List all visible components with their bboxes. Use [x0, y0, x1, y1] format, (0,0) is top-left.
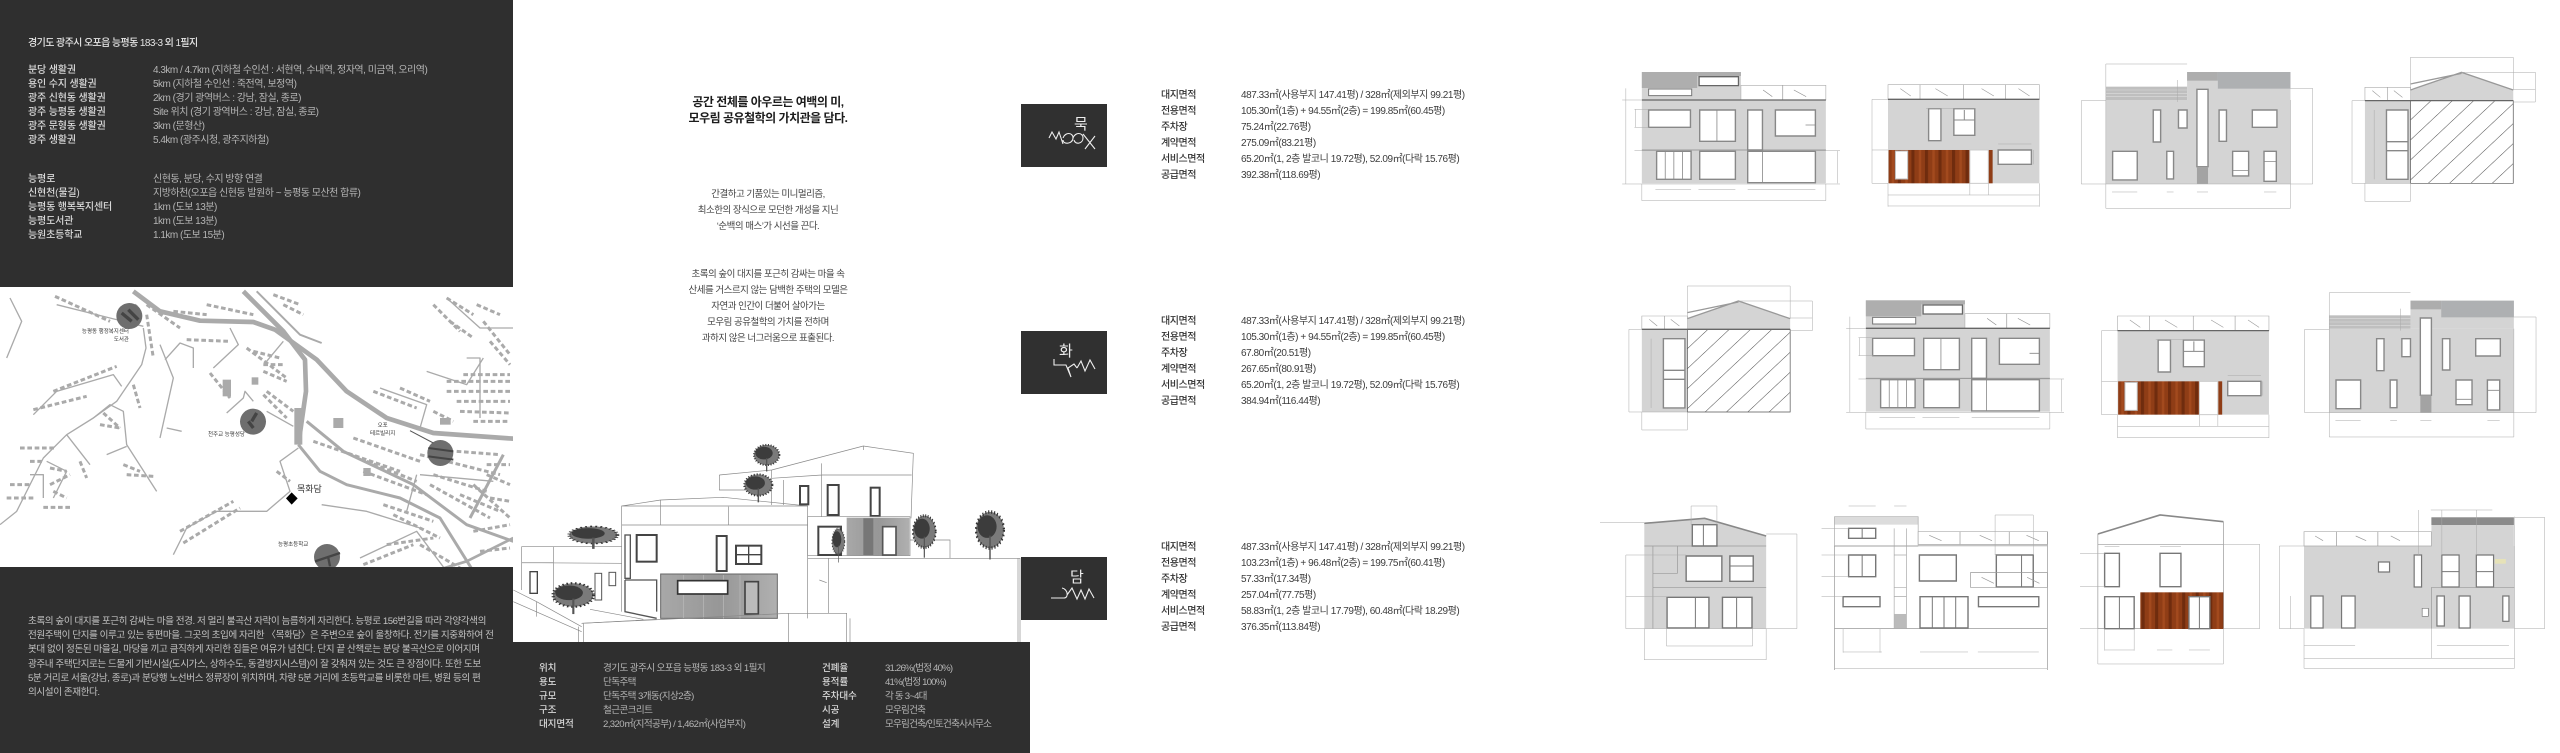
- badge squiggle: [1053, 358, 1096, 378]
- overview table: left: 철근콘크리트: [603, 705, 652, 716]
- elevation row: 묵: [1622, 57, 2535, 208]
- headline: concept title: 공간 전체를 아우르는 여백의 미,: [692, 95, 844, 109]
- trees: [553, 445, 1004, 614]
- specs: 화: 267.65㎡(80.91평): [1241, 364, 1316, 375]
- map labels: [82, 328, 395, 548]
- badge character: 담: [1070, 569, 1084, 586]
- specs: 묵: 공급면적: [1161, 170, 1196, 181]
- elevation: front: [1846, 300, 2064, 429]
- description paragraph: 5분 거리로 서울(강남, 종로)과 분당행 노선버스 정류장이 위치하며, 차량 5분 거리에 초등학교를 비롯한 마트, 병원 등의 편: [28, 673, 480, 684]
- specs: 화: 67.80㎡(20.51평): [1241, 348, 1311, 359]
- list: living areas: 4.3km / 4.7km (지하철 수인선 : 서현역, 수내역, 정자역, 미금역, 오리역): [153, 65, 427, 76]
- specs: 담: 57.33㎡(17.34평): [1241, 574, 1311, 585]
- overview table: left: 규모: [539, 691, 556, 702]
- list: living areas: 광주 문형동 생활권: [28, 121, 106, 132]
- road: local streets: [0, 298, 513, 571]
- badge: 화: [1021, 331, 1107, 394]
- label: 빌리지: [370, 422, 395, 437]
- specs: 화: 주차장: [1161, 348, 1187, 359]
- badge: 묵: [1021, 104, 1107, 167]
- elevation: party wall: [1629, 286, 1812, 430]
- list: living areas: 광주 능평동 생활권: [28, 107, 106, 118]
- list: living areas: Site 위치 (경기 광역버스 : 강남, 잠실, 종로): [153, 107, 318, 118]
- overview table: right: 41%(법정 100%): [885, 677, 946, 688]
- badge squiggle: [1051, 587, 1094, 600]
- label: 행정복지센터: [82, 328, 129, 343]
- upper house: [719, 446, 913, 518]
- text: philosophy: 과하지 않은 너그러움으로 표출된다.: [702, 333, 834, 344]
- label: 초등학교: 능평초등학교: [278, 542, 308, 548]
- specs: 화: 전용면적: [1161, 332, 1196, 343]
- list: nearby facilities: 능원초등학교: [28, 230, 82, 241]
- panel: location info: [0, 0, 513, 287]
- elevation: grey flank: [2279, 510, 2545, 668]
- lower right block: [808, 517, 950, 558]
- overview table: left: 2,320㎡(지적공부) / 1,462㎡(사업부지): [603, 719, 745, 730]
- list: nearby facilities: 지방하천(오포읍 신현동 발원하 ~ 능평동 모산천 합류): [153, 188, 360, 199]
- specs: 담: 257.04㎡(77.75평): [1241, 590, 1316, 601]
- list: nearby facilities: 신현천(물길): [28, 188, 80, 199]
- specs: 묵: 계약면적: [1161, 138, 1196, 149]
- list: nearby facilities: 1km (도보 13분): [153, 202, 217, 213]
- specs: 화: 65.20㎡(1, 2층 발코니 19.72평), 52.09㎡(다락 15.76평): [1241, 380, 1459, 391]
- illustration: perspective line drawing of the houses: [513, 444, 1020, 642]
- specs: 담: 계약면적: [1161, 590, 1196, 601]
- overview table: right: 건폐율: [822, 663, 848, 674]
- text: philosophy: 모우림 공유철학의 가치를 전하며: [707, 317, 829, 328]
- label: 빌리지: 테르빌리지: [370, 431, 395, 437]
- elevation: rear: [2102, 316, 2269, 438]
- marker: 성당: [240, 409, 266, 435]
- panel: project overview: [513, 642, 1030, 753]
- overview table: right: 설계: [822, 719, 839, 730]
- text: philosophy: 산세를 거스르지 않는 담백한 주택의 모델은: [688, 285, 848, 296]
- overview table: right: 각 동 3~4대: [885, 691, 927, 702]
- label: 행정복지센터: 능평동 행정복지센터: [82, 329, 129, 335]
- specs: 담: 대지면적: [1161, 542, 1196, 553]
- specs: 담: [1161, 540, 1465, 633]
- specs: 묵: 487.33㎡(사용부지 147.41평) / 328㎡(제외부지 99.21평): [1241, 90, 1465, 101]
- overview table: left: 대지면적: [539, 719, 574, 730]
- label: 목화담: 목화담: [297, 484, 322, 494]
- list: nearby facilities: 신현동, 분당, 수지 방향 연결: [153, 174, 262, 185]
- list: nearby facilities: 능평도서관: [28, 216, 73, 227]
- list: living areas: 5km (지하철 수인선 : 죽전역, 보정역): [153, 79, 296, 90]
- specs: 묵: 전용면적: [1161, 106, 1196, 117]
- specs: 화: 서비스면적: [1161, 380, 1205, 391]
- panel: neighbourhood description: [0, 567, 513, 753]
- overview table: left: 단독주택: [603, 677, 636, 688]
- elevation row: 담: [1600, 506, 2545, 670]
- specs: 묵: 서비스면적: [1161, 154, 1205, 165]
- list: living areas: 광주 생활권: [28, 135, 76, 146]
- text: minimalism: 간결하고 기품있는 미니멀리즘,: [711, 189, 825, 200]
- list: nearby facilities: [28, 173, 360, 241]
- badge squiggle: [1048, 130, 1096, 150]
- badge character: 화: [1059, 343, 1073, 360]
- text: minimalism: [698, 188, 838, 232]
- overview table: left: 위치: [539, 663, 556, 674]
- specs: 묵: 275.09㎡(83.21평): [1241, 138, 1316, 149]
- specs: 담: 전용면적: [1161, 558, 1196, 569]
- headline: concept title: 모우림 공유철학의 가치관을 담다.: [689, 111, 847, 125]
- main house: [622, 497, 808, 618]
- overview table: right: [822, 662, 992, 730]
- text: philosophy: 초록의 숲이 대지를 포근히 감싸는 마을 속: [692, 269, 844, 280]
- list: living areas: [28, 64, 428, 146]
- description paragraph: 의시설이 존재한다.: [28, 687, 100, 698]
- address heading: 경기도 광주시 오포읍 능평동 183-3 외 1필지: [28, 38, 198, 49]
- specs: 화: [1161, 314, 1465, 407]
- marker: 오포 빌리지: [410, 431, 453, 466]
- list: nearby facilities: 1.1km (도보 15분): [153, 230, 224, 241]
- specs: 묵: [1161, 88, 1465, 181]
- map: surrounding neighbourhood: [0, 290, 513, 567]
- list: nearby facilities: 능평동 행복복지센터: [28, 202, 112, 213]
- description paragraph: 초록의 숲이 대지를 포근히 감싸는 마을 전경. 저 멀리 불곡산 자락이 늠름하게 자리한다. 능평로 156번길을 따라 각양각색의: [28, 616, 486, 627]
- specs: 묵: 대지면적: [1161, 90, 1196, 101]
- elevation: front gable: [1600, 506, 1797, 660]
- list: nearby facilities: 1km (도보 13분): [153, 216, 217, 227]
- specs: 화: 384.94㎡(116.44평): [1241, 396, 1320, 407]
- elevation: front: [1622, 72, 1840, 201]
- badge: 담: [1021, 557, 1107, 620]
- list: living areas: 2km (경기 광역버스 : 강남, 잠실, 종로): [153, 93, 301, 104]
- elevation row: 화: [1629, 286, 2536, 438]
- overview table: left: 단독주택 3개동(지상2층): [603, 691, 694, 702]
- specs: 담: 주차장: [1161, 574, 1187, 585]
- marker: 목화담 site: [286, 492, 298, 505]
- far house: [513, 547, 622, 632]
- list: nearby facilities: 능평로: [28, 174, 55, 185]
- text: minimalism: 최소한의 장식으로 모던한 개성을 지닌: [698, 205, 838, 216]
- overview table: right: 주차대수: [822, 691, 857, 702]
- specs: 묵: 주차장: [1161, 122, 1187, 133]
- elevation: side: [2305, 293, 2536, 437]
- retaining walls: [578, 558, 1020, 642]
- text: philosophy: 자연과 인간이 더불어 살아가는: [711, 301, 825, 312]
- specs: 묵: 75.24㎡(22.76평): [1241, 122, 1311, 133]
- description paragraph: [28, 616, 494, 698]
- specs: 담: 58.83㎡(1, 2층 발코니 17.79평), 60.48㎡(다락 18.29평): [1241, 606, 1459, 617]
- road: expressway: [133, 291, 513, 571]
- list: living areas: 광주 신현동 생활권: [28, 93, 106, 104]
- specs: 묵: 65.20㎡(1, 2층 발코니 19.72평), 52.09㎡(다락 15.76평): [1241, 154, 1459, 165]
- overview table: left: [539, 662, 765, 730]
- overview table: left: 경기도 광주시 오포읍 능평동 183-3 외 1필지: [603, 663, 765, 674]
- description paragraph: 광주내 주택단지로는 드물게 기반시설(도시가스, 상하수도, 동결방지시스템)이 잘 갖춰져 있는 것도 큰 장점이다. 또한 도보: [28, 659, 481, 670]
- text: philosophy: [688, 268, 848, 344]
- headline: concept title: [689, 95, 848, 125]
- elevation: white rear: [1822, 506, 2047, 670]
- elevation: brown rear: [2080, 515, 2260, 664]
- specs: 화: 대지면적: [1161, 316, 1196, 327]
- specs: 담: 103.23㎡(1층) + 96.48㎡(2층) = 199.75㎡(60.41평): [1241, 558, 1445, 569]
- specs: 묵: 392.38㎡(118.69평): [1241, 170, 1320, 181]
- elevation: party wall: [2352, 57, 2535, 201]
- list: living areas: 용인 수지 생활권: [28, 79, 97, 90]
- overview table: right: 시공: [822, 705, 839, 716]
- buildings along streets: [7, 295, 510, 568]
- list: living areas: 분당 생활권: [28, 65, 76, 76]
- overview table: left: 용도: [539, 677, 556, 688]
- specs: 묵: 105.30㎡(1층) + 94.55㎡(2층) = 199.85㎡(60.45평): [1241, 106, 1445, 117]
- overview table: right: 모우림건축/인토건축사사무소: [885, 719, 991, 730]
- overview table: right: 용적률: [822, 677, 848, 688]
- specs: 담: 487.33㎡(사용부지 147.41평) / 328㎡(제외부지 99.21평): [1241, 542, 1465, 553]
- elevation: rear: [1872, 85, 2039, 207]
- badge character: 묵: [1074, 116, 1088, 133]
- label: 빌리지: 오포: [378, 423, 388, 429]
- elevation: side: [2081, 64, 2313, 208]
- specs: 담: 서비스면적: [1161, 606, 1205, 617]
- specs: 화: 487.33㎡(사용부지 147.41평) / 328㎡(제외부지 99.21평): [1241, 316, 1465, 327]
- overview table: right: 31.26%(법정 40%): [885, 663, 952, 674]
- list: living areas: 3km (문형산): [153, 121, 204, 132]
- label: 성당: 천주교 능평성당: [208, 432, 245, 438]
- specs: 담: 376.35㎡(113.84평): [1241, 622, 1320, 633]
- description paragraph: 봇대 없이 정돈된 마을길, 마당을 끼고 큼직하게 자리한 집들은 여유가 넘친다. 단지 끝 산책로는 분당 불곡산으로 이어지며: [28, 644, 480, 655]
- specs: 화: 105.30㎡(1층) + 94.55㎡(2층) = 199.85㎡(60.45평): [1241, 332, 1445, 343]
- marker: 초등학교: [314, 544, 340, 570]
- specs: 화: 계약면적: [1161, 364, 1196, 375]
- overview table: right: 모우림건축: [885, 705, 925, 716]
- overview table: left: 구조: [539, 705, 556, 716]
- label: 행정복지센터: 도서관: [114, 337, 129, 343]
- specs: 화: 공급면적: [1161, 396, 1196, 407]
- marker: 행정복지센터: [116, 303, 142, 329]
- text: minimalism: ‘순백의 매스’가 시선을 끈다.: [717, 221, 819, 232]
- description paragraph: 전원주택이 단지를 이루고 있는 동편마을. 그곳의 초입에 자리한 〈목화담〉은 주변으로 숲이 울창하다. 전기를 지중화하여 전: [28, 630, 494, 641]
- list: living areas: 5.4km (광주시청, 광주지하철): [153, 135, 269, 146]
- specs: 담: 공급면적: [1161, 622, 1196, 633]
